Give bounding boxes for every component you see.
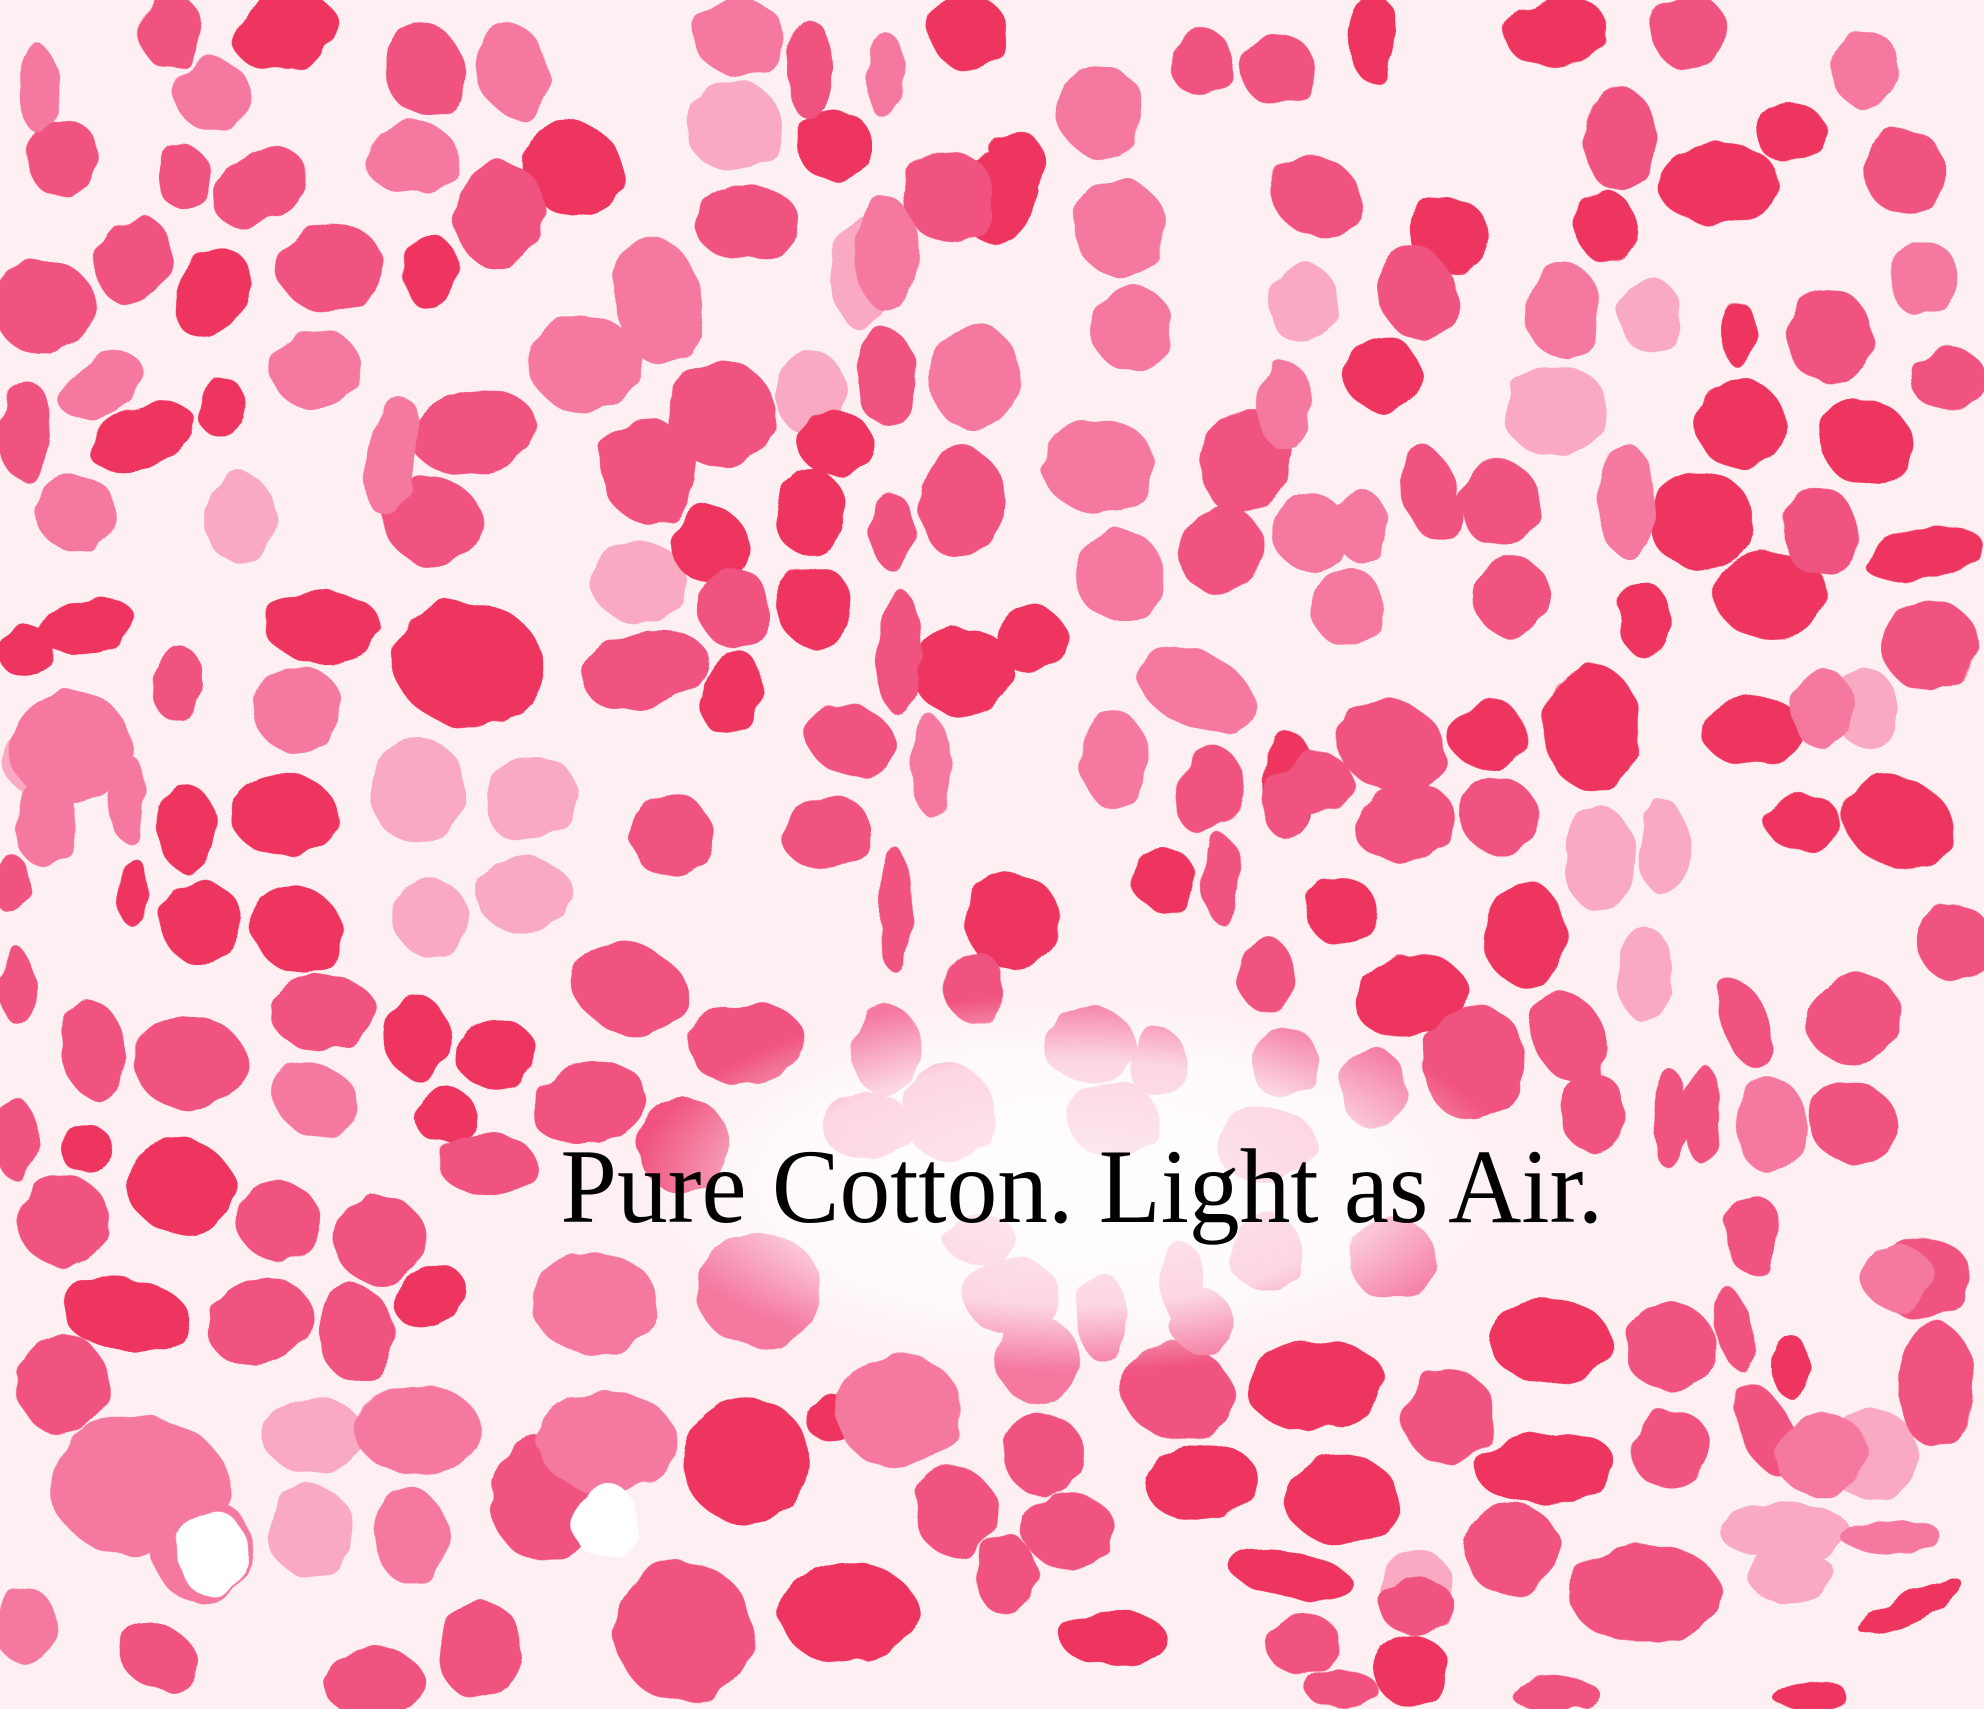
white centres of ring petals <box>177 1483 638 1596</box>
faded petals around the title <box>821 1004 1436 1404</box>
white glow behind title <box>633 993 1518 1373</box>
title: Pure Cotton. Light as Air. <box>561 1127 1603 1245</box>
